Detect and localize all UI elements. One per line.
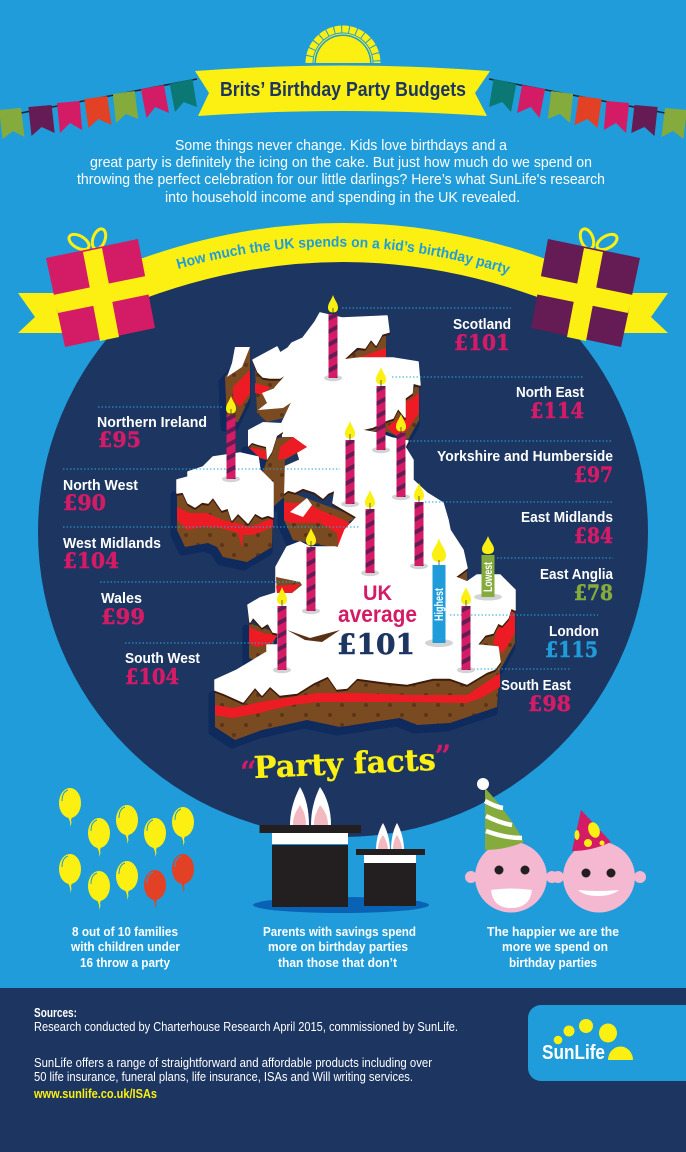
icon: top hats with rabbit ears <box>253 787 429 913</box>
sources text: Sources: <box>34 1006 77 1020</box>
title: Brits’ Birthday Party Budgets <box>220 79 466 101</box>
intro text: Some things never change. Kids love birthdays and a <box>175 137 508 154</box>
region: London: London <box>549 623 599 640</box>
region: Wales: Wales <box>101 590 142 607</box>
region: East Midlands <box>521 509 613 548</box>
region: East Anglia: East Anglia <box>540 566 614 583</box>
region: South West: £104 <box>125 664 179 689</box>
icon: happy faces with party hats <box>465 778 646 912</box>
title banner <box>195 66 490 116</box>
region: East Midlands: £84 <box>574 523 613 548</box>
caption: happiness: more we spend on <box>502 939 608 954</box>
heading: Party facts: “ <box>239 755 258 791</box>
caption: happiness: The happier we are the <box>487 924 619 939</box>
region: Northern Ireland: Northern Ireland <box>97 414 207 431</box>
region: Yorkshire and Humberside <box>437 448 613 487</box>
caption: savings: Parents with savings spend <box>263 924 416 939</box>
caption: savings: more on birthday parties <box>268 939 408 954</box>
caption: families <box>70 924 180 970</box>
bunting: right <box>489 79 686 139</box>
region: West Midlands: West Midlands <box>63 535 161 552</box>
caption: savings <box>263 924 416 970</box>
sources text: Research conducted by Charterhouse Research April 2015, commissioned by SunLife. <box>34 1020 458 1034</box>
region: South East: £98 <box>528 691 571 716</box>
Galloway slab <box>248 422 307 507</box>
caption: happiness: birthday parties <box>509 955 597 970</box>
region: South West: South West <box>125 650 200 667</box>
region: East Anglia <box>540 566 614 605</box>
region: South East <box>501 677 571 716</box>
region: North West: £90 <box>63 490 106 515</box>
icing: Skye patch <box>258 388 292 410</box>
icon: sun <box>309 29 377 63</box>
red jam layers <box>177 348 515 718</box>
region: Scotland <box>453 316 511 355</box>
caption: families: 16 throw a party <box>80 955 171 970</box>
lowest candle: East Anglia <box>474 536 502 600</box>
icon: purple gift <box>531 227 640 347</box>
UK average: average <box>338 601 417 627</box>
label: Highest: Highest <box>434 588 446 621</box>
sources text <box>34 1006 458 1034</box>
region: North West: North West <box>63 477 138 494</box>
UK average: UK <box>363 582 392 605</box>
region: West Midlands <box>63 535 161 573</box>
candles <box>222 295 475 673</box>
region: South East: South East <box>501 677 571 694</box>
intro text: into household income and spending in the UK revealed. <box>165 189 520 206</box>
region: Northern Ireland: £95 <box>98 427 141 452</box>
Wales coast slit <box>287 630 340 642</box>
bunting: left <box>0 79 197 139</box>
icon: pink gift <box>46 227 155 347</box>
label: Lowest: Lowest <box>483 562 495 592</box>
heading: Party facts: ” <box>434 739 453 775</box>
cake sides <box>177 333 515 740</box>
heading: Party facts: Party facts <box>253 743 436 786</box>
region: South West <box>125 650 200 689</box>
region: West Midlands: £104 <box>63 548 119 573</box>
intro text: great party is definitely the icing on the cake. But just how much do we spend on <box>90 154 592 171</box>
dotted leader lines <box>63 308 613 669</box>
intro text <box>77 137 605 206</box>
SunLife logo <box>528 1005 686 1081</box>
ribbon heading: How much the UK spends on a kid’s birthday party <box>176 236 510 276</box>
region: Yorkshire and Humberside: £97 <box>574 462 613 487</box>
icing: main island <box>215 313 515 704</box>
region: North East: North East <box>516 384 584 401</box>
icon: balloons <box>59 788 194 910</box>
website link: www.sunlife.co.uk/ISAs <box>33 1087 157 1101</box>
region: Scotland: Scotland <box>453 316 511 333</box>
region: East Midlands: East Midlands <box>521 509 613 526</box>
Outer Hebrides icing <box>227 347 250 377</box>
UK average: £101 <box>337 628 415 661</box>
region: Scotland: £101 <box>454 330 510 355</box>
region: Wales: £99 <box>101 604 145 629</box>
intro text: throwing the perfect celebration for our little darlings? Here’s what SunLife's research <box>77 171 605 188</box>
UK average <box>337 582 417 661</box>
north Wales wall <box>276 577 302 593</box>
region: East Anglia: £78 <box>574 580 613 605</box>
highest candle: London <box>425 538 453 647</box>
UK map cake <box>174 313 515 745</box>
region: North East <box>516 384 584 423</box>
Northern Ireland icing <box>177 453 273 525</box>
region: North East: £114 <box>530 398 584 423</box>
product text: SunLife offers a range of straightforward and affordable products including over <box>34 1056 432 1070</box>
caption: happiness <box>487 924 619 970</box>
SunLife logo: SunLife <box>542 1042 605 1064</box>
region: Yorkshire and Humberside: Yorkshire and Humberside <box>437 448 613 465</box>
region: North West <box>63 477 138 515</box>
product text <box>34 1056 432 1084</box>
arched ribbon <box>18 223 668 333</box>
cake shadows <box>174 353 512 745</box>
navy circle backdrop <box>38 227 648 837</box>
caption: families: with children under <box>70 939 180 954</box>
region: Northern Ireland <box>97 414 207 452</box>
footer panel <box>0 988 686 1152</box>
caption: savings: than those that don’t <box>278 955 398 970</box>
product text: 50 life insurance, funeral plans, life insurance, ISAs and Will writing services. <box>34 1070 413 1084</box>
caption: families: 8 out of 10 families <box>72 924 178 939</box>
region: London <box>545 623 599 662</box>
region: London: £115 <box>545 637 598 662</box>
region: Wales <box>101 590 145 629</box>
lake patch <box>290 498 312 517</box>
